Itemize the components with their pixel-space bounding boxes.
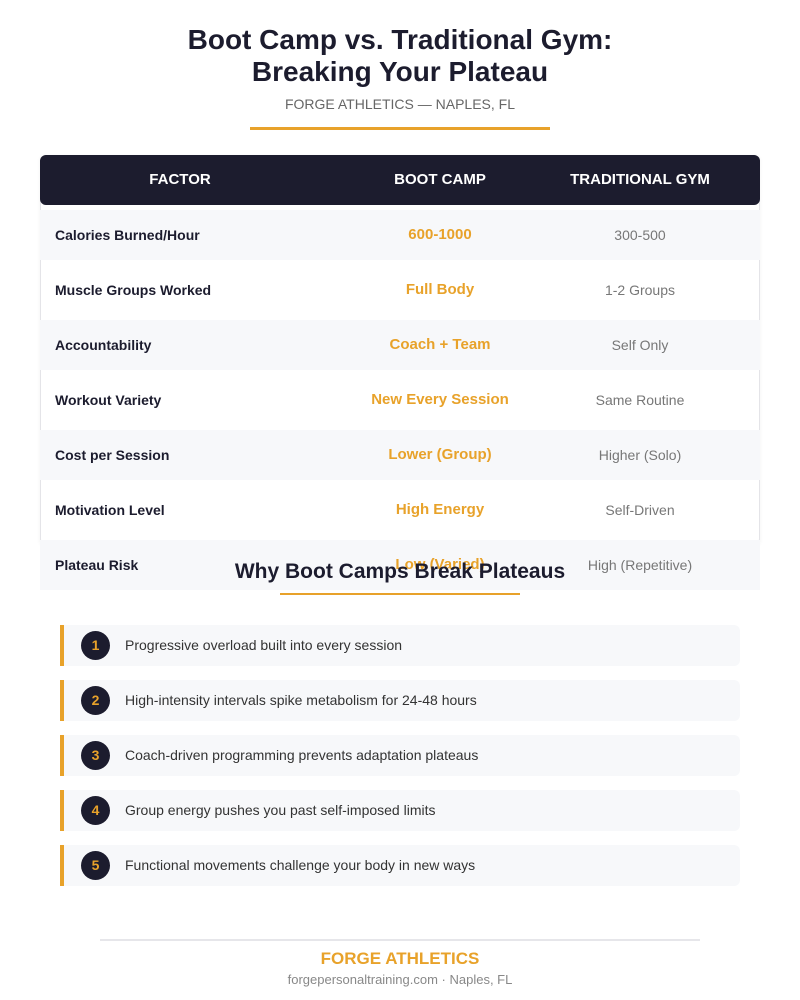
row: calories: Calories Burned/Hour — [55, 227, 200, 243]
row: plateau risk: Low (Varied) — [395, 556, 485, 573]
reason 4: 4 — [92, 802, 99, 818]
row: calories: 300-500 — [614, 227, 666, 243]
row: muscle groups: Full Body — [406, 281, 474, 298]
row: plateau risk: Plateau Risk — [55, 557, 138, 573]
title — [188, 24, 612, 87]
row: motivation: Self-Driven — [605, 502, 675, 518]
reason 3: 3 — [92, 747, 99, 763]
title: Breaking Your Plateau — [252, 56, 548, 87]
row: cost: Lower (Group) — [388, 446, 492, 463]
title: Boot Camp vs. Traditional Gym: — [188, 24, 612, 55]
row: motivation: High Energy — [396, 501, 484, 518]
reason 2: 2 — [92, 692, 99, 708]
row: variety: Same Routine — [596, 392, 684, 408]
reason 1: 1 — [92, 637, 99, 653]
row: variety: Workout Variety — [55, 392, 161, 408]
reason 5 — [60, 845, 740, 886]
row: muscle groups: Muscle Groups Worked — [55, 282, 211, 298]
list of reasons — [60, 625, 478, 886]
row: variety: New Every Session — [371, 391, 509, 408]
reason 2 — [60, 680, 740, 721]
reason 3: Coach-driven programming prevents adaptation plateaus — [125, 747, 478, 763]
reason 3 — [60, 735, 740, 776]
row: muscle groups: 1-2 Groups — [605, 282, 675, 298]
table header — [40, 155, 760, 205]
table header: FACTOR — [149, 171, 211, 188]
reason 4: Group energy pushes you past self-imposed limits — [125, 802, 435, 818]
reason 5: Functional movements challenge your body in new ways — [125, 857, 475, 873]
comparison table — [40, 155, 760, 573]
reason 4 — [60, 790, 740, 831]
footer: FORGE ATHLETICS — [321, 949, 479, 968]
row: motivation — [55, 501, 675, 518]
row: accountability: Self Only — [612, 337, 668, 353]
row: cost — [40, 430, 760, 480]
reason 2: High-intensity intervals spike metabolism for 24-48 hours — [125, 692, 477, 708]
footer — [100, 939, 700, 991]
row: motivation: Motivation Level — [55, 502, 165, 518]
row: accountability: Coach + Team — [389, 336, 490, 353]
row: accountability: Accountability — [55, 337, 151, 353]
row: variety — [55, 391, 684, 408]
reason 5: 5 — [92, 857, 99, 873]
row: muscle groups — [55, 281, 675, 298]
footer: forgepersonaltraining.com · Naples, FL — [288, 972, 512, 987]
row: plateau risk: High (Repetitive) — [588, 557, 692, 573]
row: cost: Cost per Session — [55, 447, 169, 463]
row: calories: 600-1000 — [408, 226, 472, 243]
row: plateau risk — [40, 540, 760, 590]
row: accountability — [40, 320, 760, 370]
subtitle: FORGE ATHLETICS — NAPLES, FL — [285, 96, 515, 112]
table header: TRADITIONAL GYM — [570, 171, 710, 188]
table header: BOOT CAMP — [394, 171, 486, 188]
row: cost: Higher (Solo) — [599, 447, 681, 463]
reason 1 — [60, 625, 740, 666]
section heading: Why Boot Camps Break Plateaus — [235, 560, 565, 583]
row: calories — [40, 210, 760, 260]
reason 1: Progressive overload built into every session — [125, 637, 402, 653]
